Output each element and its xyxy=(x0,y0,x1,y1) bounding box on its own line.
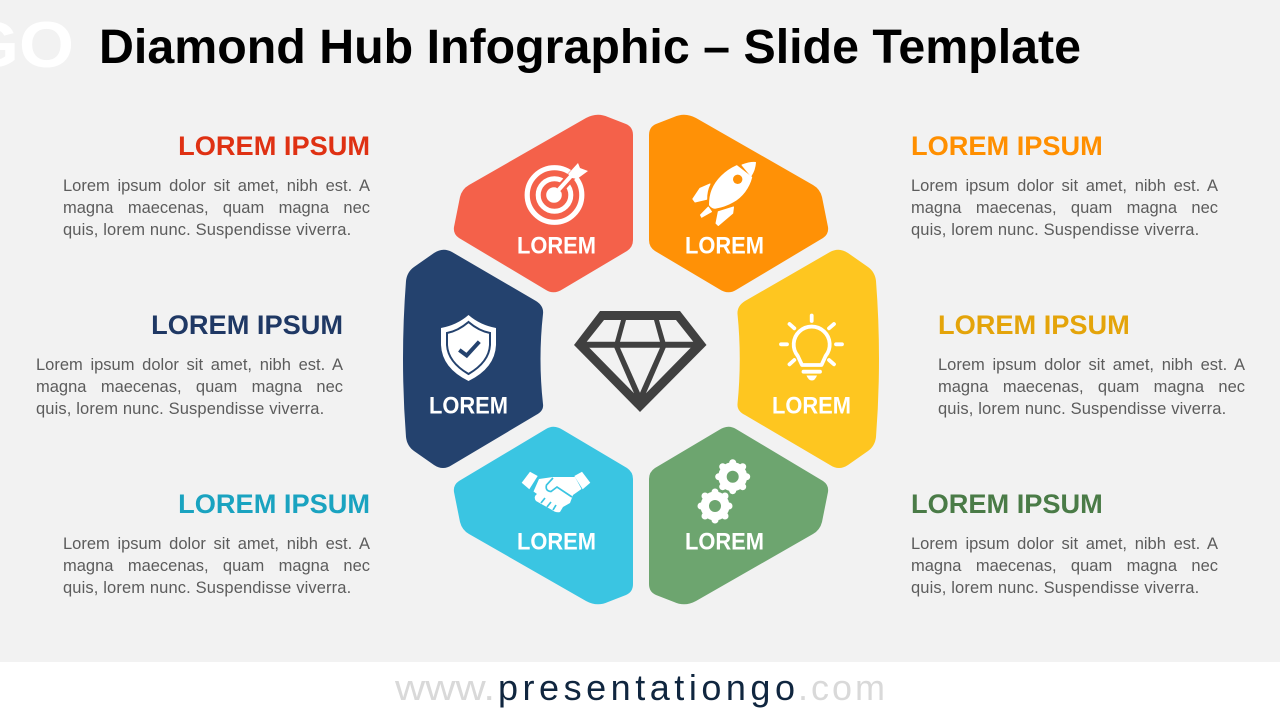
body text: Lorem ipsum dolor sit amet, nibh est. A xyxy=(938,356,1245,374)
segment label: LOREM xyxy=(429,392,508,420)
body text: magna maecenas, quam magna nec xyxy=(911,199,1218,217)
segment: cyan handshake xyxy=(454,427,633,604)
icon: rocket xyxy=(693,162,756,226)
icon: gears xyxy=(700,462,747,520)
logo fragment xyxy=(0,8,74,81)
body text: magna maecenas, quam magna nec xyxy=(938,378,1245,396)
body text xyxy=(63,534,370,597)
body text: quis, lorem nunc. Suspendisse viverra. xyxy=(63,221,351,239)
footer website address: presentationgo xyxy=(498,667,795,708)
green hexagon xyxy=(649,427,828,604)
body text xyxy=(36,356,343,418)
body text: Lorem ipsum dolor sit amet, nibh est. A xyxy=(911,176,1218,194)
text block: navy xyxy=(36,309,343,418)
body text: quis, lorem nunc. Suspendisse viverra. xyxy=(63,579,351,597)
footer band xyxy=(0,662,1280,720)
logo fragment: O xyxy=(19,8,74,81)
segment label: LOREM xyxy=(685,232,764,260)
body text: magna maecenas, quam magna nec xyxy=(36,378,343,396)
segment: orange rocket xyxy=(649,115,828,292)
footer website address: .com xyxy=(798,667,885,708)
text block: green xyxy=(911,488,1218,597)
heading: LOREM IPSUM xyxy=(178,130,370,161)
text block: red xyxy=(63,130,370,239)
body text: Lorem ipsum dolor sit amet, nibh est. A xyxy=(36,356,343,374)
body text: quis, lorem nunc. Suspendisse viverra. xyxy=(911,221,1199,239)
red hexagon xyxy=(454,115,633,292)
segment: red target xyxy=(454,115,633,292)
text block: cyan xyxy=(63,488,370,597)
body text xyxy=(911,534,1218,597)
title: Diamond Hub Infographic – Slide Template xyxy=(99,21,1081,74)
body text: magna maecenas, quam magna nec xyxy=(911,557,1218,575)
icon: light bulb xyxy=(781,316,842,380)
segment label: LOREM xyxy=(772,392,851,420)
body text: magna maecenas, quam magna nec xyxy=(63,199,370,217)
segment label: LOREM xyxy=(517,232,596,260)
segment: navy shield xyxy=(403,250,543,468)
text block: orange xyxy=(911,130,1218,239)
orange hexagon xyxy=(649,115,828,292)
heading: LOREM IPSUM xyxy=(938,309,1130,340)
yellow hexagon xyxy=(737,250,879,468)
text block: yellow xyxy=(938,309,1245,418)
segment: green gears xyxy=(649,427,828,604)
icon: target xyxy=(527,163,588,222)
heading: LOREM IPSUM xyxy=(911,488,1103,519)
body text: quis, lorem nunc. Suspendisse viverra. xyxy=(36,400,324,418)
heading: LOREM IPSUM xyxy=(911,130,1103,161)
body text xyxy=(938,356,1245,418)
body text: magna maecenas, quam magna nec xyxy=(63,557,370,575)
segment label: LOREM xyxy=(685,528,764,556)
body text xyxy=(911,176,1218,239)
footer website address: www. xyxy=(394,667,495,708)
footer website address xyxy=(394,667,885,708)
body text: Lorem ipsum dolor sit amet, nibh est. A xyxy=(63,534,370,552)
navy hexagon xyxy=(403,250,543,468)
body text xyxy=(63,176,370,239)
icon: handshake xyxy=(522,472,590,512)
icon: shield xyxy=(441,315,496,381)
heading: LOREM IPSUM xyxy=(151,309,343,340)
segment label: LOREM xyxy=(517,528,596,556)
body text: quis, lorem nunc. Suspendisse viverra. xyxy=(911,579,1199,597)
icon: central diamond xyxy=(574,311,706,412)
heading: LOREM IPSUM xyxy=(178,488,370,519)
body text: Lorem ipsum dolor sit amet, nibh est. A xyxy=(63,176,370,194)
body text: quis, lorem nunc. Suspendisse viverra. xyxy=(938,400,1226,418)
body text: Lorem ipsum dolor sit amet, nibh est. A xyxy=(911,534,1218,552)
cyan hexagon xyxy=(454,427,633,604)
segment: yellow bulb xyxy=(737,250,879,468)
